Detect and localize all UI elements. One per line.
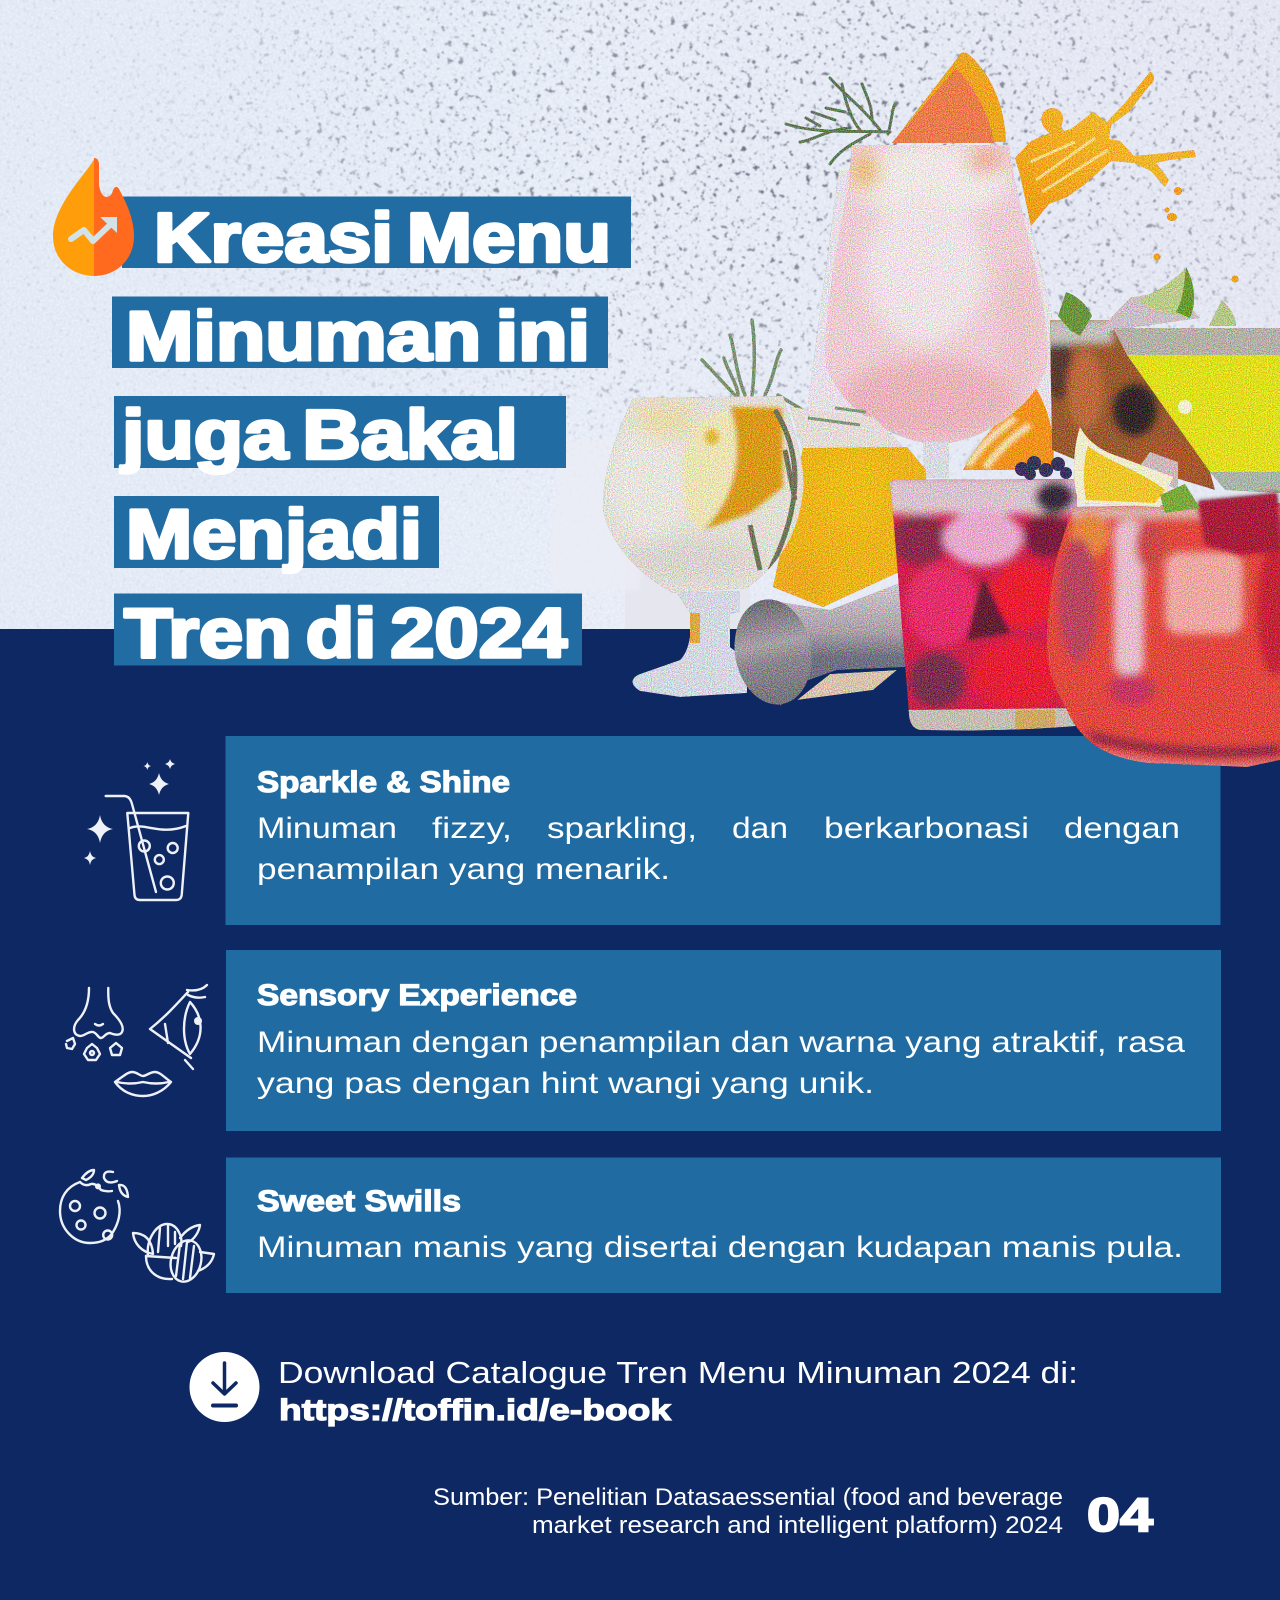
description: Sensory Experience: yang pas dengan hint wangi yang unik.	[257, 1067, 874, 1100]
download call to action	[190, 1352, 1078, 1427]
yellow drink	[770, 407, 930, 610]
rosemary top	[786, 78, 895, 164]
title line 3: juga Bakal	[120, 396, 518, 474]
icon: download	[190, 1352, 260, 1422]
title	[112, 196, 631, 672]
description: Sparkle & Shine	[257, 812, 1180, 886]
description: Sensory Experience	[257, 1026, 1185, 1100]
title line 5: Tren di 2024	[124, 594, 567, 672]
pink glass stem	[923, 442, 949, 478]
heading: Sensory Experience: Sensory Experience	[257, 979, 577, 1012]
description: Sparkle & Shine: dan	[732, 812, 788, 845]
title line 2: Minuman ini	[126, 297, 590, 375]
description: Sparkle & Shine: dengan	[1064, 812, 1180, 845]
panel: Sweet Swills	[226, 1158, 1221, 1293]
description: Sparkle & Shine: Minuman	[257, 812, 397, 845]
pink glass	[820, 140, 1055, 450]
source note	[433, 1484, 1063, 1539]
heading: Sweet Swills: Sweet Swills	[257, 1185, 461, 1218]
panel: Sparkle & Shine	[226, 736, 1220, 925]
heading: Sparkle & Shine: Sparkle & Shine	[257, 766, 510, 799]
lime and mint garnish	[1058, 267, 1236, 336]
navy lower panel	[0, 629, 1280, 1600]
juice splash	[1015, 72, 1238, 282]
drinks illustration	[598, 52, 1280, 775]
back glass	[808, 170, 1053, 440]
ghost glass in background	[551, 437, 640, 590]
red glass	[1045, 427, 1280, 775]
description: Sparkle & Shine: fizzy,	[432, 812, 512, 845]
icon: nose, eye and lips	[66, 985, 207, 1096]
panel: Sensory Experience	[226, 950, 1221, 1131]
icon: sparkling drink	[84, 759, 188, 900]
icon: flame with trending arrow	[53, 158, 134, 276]
rosemary left	[702, 320, 806, 412]
pale table band behind drinks	[625, 440, 750, 630]
source note: market research and intelligent platform) 2024	[532, 1512, 1063, 1539]
source note: Sumber: Penelitian Datasaessential (food and beverage	[433, 1484, 1063, 1511]
orange behind glass	[963, 387, 1054, 470]
download text: Download Catalogue Tren Menu Minuman 2024 di:	[278, 1355, 1078, 1390]
yellow-green cocktail	[1045, 290, 1280, 495]
description: Sensory Experience: Minuman dengan penampilan dan warna yang atraktif, rasa	[257, 1026, 1185, 1059]
page number: 04	[1087, 1488, 1153, 1541]
description: Sparkle & Shine: penampilan yang menarik.	[257, 853, 670, 886]
description: Sparkle & Shine: sparkling,	[547, 812, 697, 845]
description: Sparkle & Shine: berkarbonasi	[824, 812, 1029, 845]
grapefruit wedge	[892, 52, 1006, 143]
download url: https://toffin.id/e-book	[279, 1394, 671, 1427]
jigger	[726, 583, 907, 711]
berry glass	[885, 456, 1080, 732]
description: Sweet Swills: Minuman manis yang disertai dengan kudapan manis pula.	[257, 1231, 1183, 1264]
snifter glass	[598, 394, 808, 697]
icon: cookie and almonds	[60, 1170, 214, 1285]
title line 4: Menjadi	[126, 495, 422, 573]
speckled background	[0, 0, 1280, 640]
title line 1: Kreasi Menu	[154, 198, 611, 276]
